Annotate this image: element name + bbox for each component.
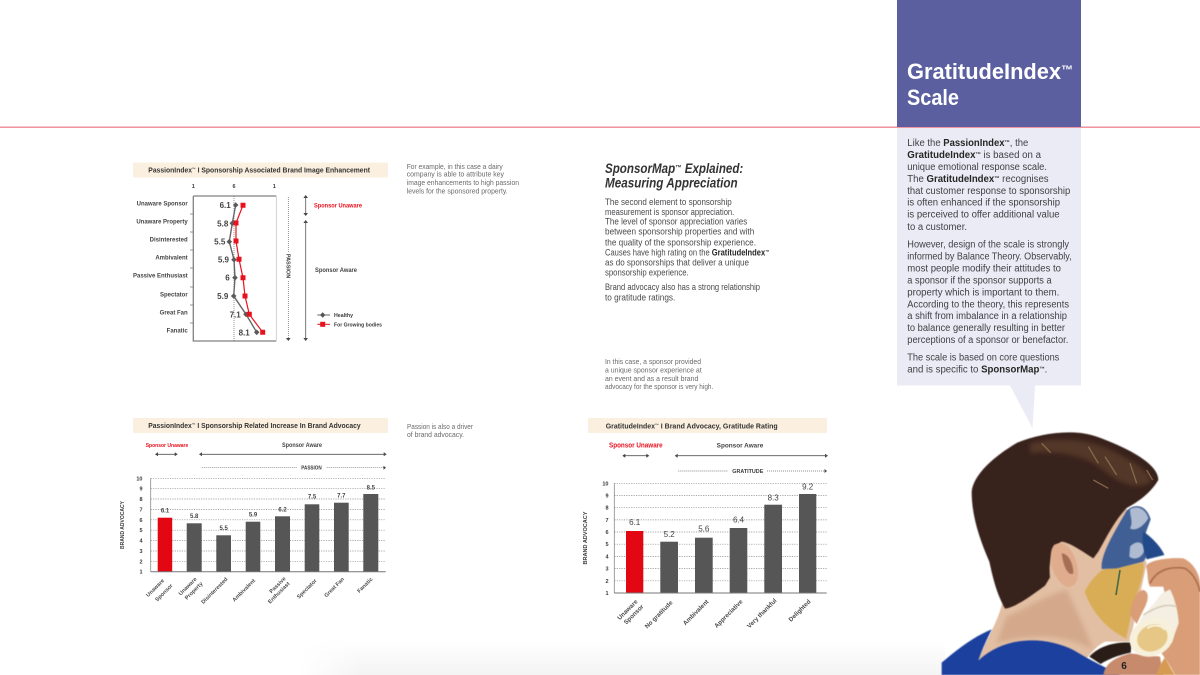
note: unique sponsor experience: an event and as a result brand <box>605 374 698 383</box>
heading: SponsorMap™ Explained: <box>605 161 743 176</box>
bar values: 6.1 <box>161 509 170 515</box>
face paint highlights <box>1129 507 1148 559</box>
bar values: 5.6 <box>698 524 710 533</box>
bar values: 5.8 <box>190 514 199 520</box>
category labels <box>616 597 813 630</box>
shirt hint <box>1156 657 1175 675</box>
finger creases <box>1150 568 1200 592</box>
awareness arrows <box>303 195 363 341</box>
neck and face skin <box>977 508 1147 662</box>
category labels: Spectator <box>296 578 319 600</box>
category labels: Great Fan <box>324 576 346 599</box>
heading <box>605 161 743 190</box>
legend: Healthy <box>334 313 354 319</box>
note: dairy company example: company is able to attribute key <box>407 170 504 178</box>
note: unique sponsor experience <box>605 357 713 391</box>
category labels: Unaware Sponsor <box>137 201 188 207</box>
y axis: 9 <box>605 494 608 500</box>
segment labels and arrows: Sponsor Aware <box>282 443 323 449</box>
category labels: Unaware <box>145 578 166 599</box>
body copy: sponsorship experience. <box>605 268 689 278</box>
tube shading <box>1143 605 1176 615</box>
sidebar body text: perceptions of a sponsor or benefactor. <box>907 335 1068 346</box>
sidebar body text: a shift from imbalance in a relationship <box>907 311 1067 322</box>
legend: For Growing bodies <box>334 322 382 328</box>
note: passion drives advocacy: of brand advocacy. <box>407 430 464 439</box>
page number: 6 <box>1121 661 1127 672</box>
note: unique sponsor experience: advocacy for the sponsor is very high. <box>605 382 713 391</box>
bar values <box>629 483 814 539</box>
category labels: Very thankful <box>746 597 779 630</box>
category labels: Disinterested <box>150 238 188 244</box>
tube <box>1136 589 1179 643</box>
page rule <box>0 126 1200 128</box>
sidebar body text: Like the PassionIndex™, the <box>907 138 1029 149</box>
awareness arrows: Sponsor Unaware <box>314 203 363 209</box>
chart heading <box>133 418 388 433</box>
y axis: 2 <box>605 579 608 585</box>
y axis: 4 <box>139 539 143 545</box>
body copy: The level of sponsor appreciation varies <box>605 217 748 227</box>
gridlines <box>151 478 386 561</box>
chart heading: PassionIndex™ I Sponsorship Associated Brand Image Enhancement <box>148 166 371 175</box>
thumb <box>1130 590 1148 624</box>
hair strands <box>1042 443 1153 488</box>
photo: fan with painted face <box>942 432 1200 675</box>
sidebar body text: a sponsor if the sponsor supports a <box>907 276 1052 287</box>
data values: 5.5 <box>214 238 226 247</box>
note: unique sponsor experience: In this case, a sponsor provided <box>605 357 701 366</box>
bar values: 5.5 <box>220 526 229 532</box>
chart heading: GratitudeIndex™ I Brand Advocacy, Gratitude Rating <box>606 421 778 430</box>
sidebar body text: that customer response to sponsorship <box>907 186 1071 197</box>
sidebar body text: unique emotional response scale. <box>907 162 1047 173</box>
bar values: 7.7 <box>337 493 346 499</box>
series: healthy <box>226 202 260 335</box>
category labels: Ambivalent <box>682 598 710 627</box>
panel: brand advocacy by passion bar chart <box>120 418 388 606</box>
series: for growing bodies <box>234 203 265 335</box>
paint streak <box>1116 570 1120 595</box>
nose paint <box>1143 532 1164 559</box>
panel: GratitudeIndex Scale sidebar <box>897 0 1081 428</box>
y axis: 10 <box>136 476 142 482</box>
y axis: 3 <box>139 549 142 555</box>
body copy: measurement is sponsor appreciation. <box>605 207 734 217</box>
segment labels and arrows <box>146 443 387 472</box>
sidebar body text: to a customer. <box>907 222 967 233</box>
category labels: Passive <box>269 576 287 595</box>
bar values: 9.2 <box>802 483 814 492</box>
panel: image enhancement line chart <box>133 162 388 341</box>
bars <box>626 494 816 593</box>
data values: 7.1 <box>230 310 241 319</box>
title block <box>897 0 1081 127</box>
note: dairy company example: levels for the sponsored property. <box>407 186 508 196</box>
category labels: Unaware <box>616 598 640 622</box>
sidebar body text: However, design of the scale is strongly <box>907 240 1069 251</box>
note: dairy company example <box>407 162 519 196</box>
y axis: 5 <box>139 528 142 534</box>
awareness arrows: Sponsor Aware <box>315 268 358 274</box>
title block: GratitudeIndex™ <box>907 59 1073 84</box>
category labels: Sponsor <box>623 603 646 626</box>
note: dairy company example: For example, in this case a dairy <box>407 162 503 171</box>
category labels: Disinterested <box>201 577 229 606</box>
bar values: 7.5 <box>308 494 317 500</box>
data values: 6.1 <box>220 201 231 210</box>
segment labels and arrows: Sponsor Unaware <box>146 443 188 449</box>
body copy: as do sponsorships that deliver a unique <box>605 257 749 267</box>
y axis: 9 <box>139 487 142 493</box>
sidebar body text <box>907 138 1072 376</box>
category labels: Ambivalent <box>155 256 188 262</box>
segment labels and arrows: PASSION <box>301 466 322 472</box>
tube rim <box>1123 611 1180 664</box>
sidebar body text: most people modify their attitudes to <box>907 263 1061 274</box>
bars <box>158 494 378 572</box>
category labels: Great Fan <box>160 310 188 316</box>
hoodie <box>942 629 1121 675</box>
title block: Scale <box>907 85 959 110</box>
y axis <box>583 481 614 597</box>
sidebar body text: is perceived to offer additional value <box>907 210 1060 221</box>
hand and fingers <box>1146 558 1200 675</box>
neck shading <box>997 590 1093 650</box>
sidebar body text: and is specific to SponsorMap™. <box>907 365 1047 376</box>
category labels: No gratitude <box>644 599 675 630</box>
body copy: to gratitude ratings. <box>605 292 675 302</box>
y axis: 2 <box>139 559 142 565</box>
lower hand under chin <box>1103 653 1163 675</box>
category labels: Property <box>184 581 205 601</box>
body copy <box>605 197 769 302</box>
axis scale labels <box>192 184 276 190</box>
bar values: 6.1 <box>629 518 641 527</box>
data values: 5.9 <box>218 256 230 265</box>
y axis: 4 <box>605 554 609 560</box>
ear <box>1051 543 1078 587</box>
sidebar body text: to balance generally resulting in better <box>907 323 1066 334</box>
y axis: 1 <box>139 570 142 576</box>
y axis: 8 <box>139 497 142 503</box>
y axis: 5 <box>605 542 608 548</box>
category labels: Enthusiast <box>267 581 292 605</box>
y axis: 6 <box>605 530 608 536</box>
body copy: the quality of the sponsorship experience. <box>605 237 756 247</box>
chart heading <box>133 162 388 178</box>
sidebar body text: GratitudeIndex™ is based on a <box>907 150 1041 161</box>
axis scale labels: 1 <box>273 184 276 190</box>
bar values: 6.2 <box>278 507 287 513</box>
y axis: 7 <box>139 507 142 513</box>
category labels: Delighted <box>788 598 813 623</box>
y axis: 6 <box>139 518 142 524</box>
y axis: 3 <box>605 567 608 573</box>
body copy: Causes have high rating on the GratitudeIndex™ <box>605 247 769 257</box>
heading: Measuring Appreciation <box>605 176 738 190</box>
body copy: The second element to sponsorship <box>605 197 732 207</box>
y axis: 7 <box>605 518 608 524</box>
note: passion drives advocacy: Passion is also a driver <box>407 422 474 431</box>
bar values: 5.2 <box>664 530 675 539</box>
chart heading: PassionIndex™ I Sponsorship Related Increase In Brand Advocacy <box>148 421 362 430</box>
note: dairy company example: image enhancements to high passion <box>407 178 519 187</box>
gridlines <box>614 483 827 581</box>
note: unique sponsor experience: a unique sponsor experience at <box>605 366 702 374</box>
y axis: 10 <box>602 481 608 487</box>
category labels: Passive Enthusiast <box>133 274 188 280</box>
sidebar body text: informed by Balance Theory. Observably, <box>907 251 1072 262</box>
category labels: Appreciative <box>713 598 745 630</box>
panel: SponsorMap explained <box>605 161 769 302</box>
category labels: Fanatic <box>167 328 188 334</box>
data values: 5.9 <box>217 292 229 301</box>
category labels <box>145 576 374 606</box>
hair <box>972 432 1158 609</box>
bar values: 6.4 <box>733 516 745 525</box>
note: passion drives advocacy <box>407 422 474 439</box>
segment labels and arrows: Sponsor Aware <box>717 443 764 449</box>
data values: 8.1 <box>239 328 250 337</box>
yellow face paint <box>1085 563 1144 638</box>
sidebar body text: According to the theory, this represents <box>907 300 1069 311</box>
plot frame <box>190 196 276 341</box>
sidebar body text: The GratitudeIndex™ recognises <box>907 174 1049 185</box>
y axis: BRAND ADVOCACY <box>583 511 589 564</box>
axis scale labels: 6 <box>232 184 236 190</box>
category labels: Unaware <box>178 577 198 597</box>
category labels: Unaware Property <box>136 220 188 226</box>
body copy: Brand advocacy also has a strong relationship <box>605 282 760 292</box>
sidebar body text: The scale is based on core questions <box>907 353 1059 364</box>
bar values <box>161 485 376 532</box>
passion axis: PASSION <box>284 254 290 278</box>
passion axis <box>284 197 291 341</box>
y axis: 1 <box>605 591 608 597</box>
blue face paint <box>1102 506 1151 569</box>
chin shadow <box>1089 642 1132 664</box>
category labels: Fanatic <box>357 577 374 595</box>
legend <box>317 312 382 328</box>
hair lighter top <box>1030 439 1152 486</box>
segment labels and arrows: GRATITUDE <box>732 469 764 475</box>
bar values: 8.3 <box>768 493 779 502</box>
category labels: Ambivalent <box>232 578 257 603</box>
y axis: 8 <box>605 506 608 512</box>
category labels <box>133 201 188 334</box>
category labels: Sponsor <box>154 583 175 603</box>
category labels: Spectator <box>160 292 188 298</box>
bar values: 8.5 <box>367 485 376 491</box>
chart heading <box>588 418 827 433</box>
axis scale labels: 1 <box>192 184 195 190</box>
segment labels and arrows <box>609 442 828 475</box>
data values: 6 <box>225 274 230 283</box>
y axis <box>120 476 151 576</box>
data values <box>214 201 250 337</box>
y axis: BRAND ADVOCACY <box>120 501 126 549</box>
bottom grey shading band <box>300 640 945 675</box>
speech bubble background <box>897 128 1081 428</box>
sidebar body text: is often enhanced if the sponsorship <box>907 198 1060 209</box>
panel: brand advocacy by gratitude bar chart <box>583 418 828 630</box>
body copy: between sponsorship properties and with <box>605 227 754 237</box>
data values: 5.8 <box>217 219 229 228</box>
segment labels and arrows: Sponsor Unaware <box>609 442 663 449</box>
sidebar body text: property which is important to them. <box>907 288 1059 299</box>
bar values: 5.9 <box>249 513 258 519</box>
